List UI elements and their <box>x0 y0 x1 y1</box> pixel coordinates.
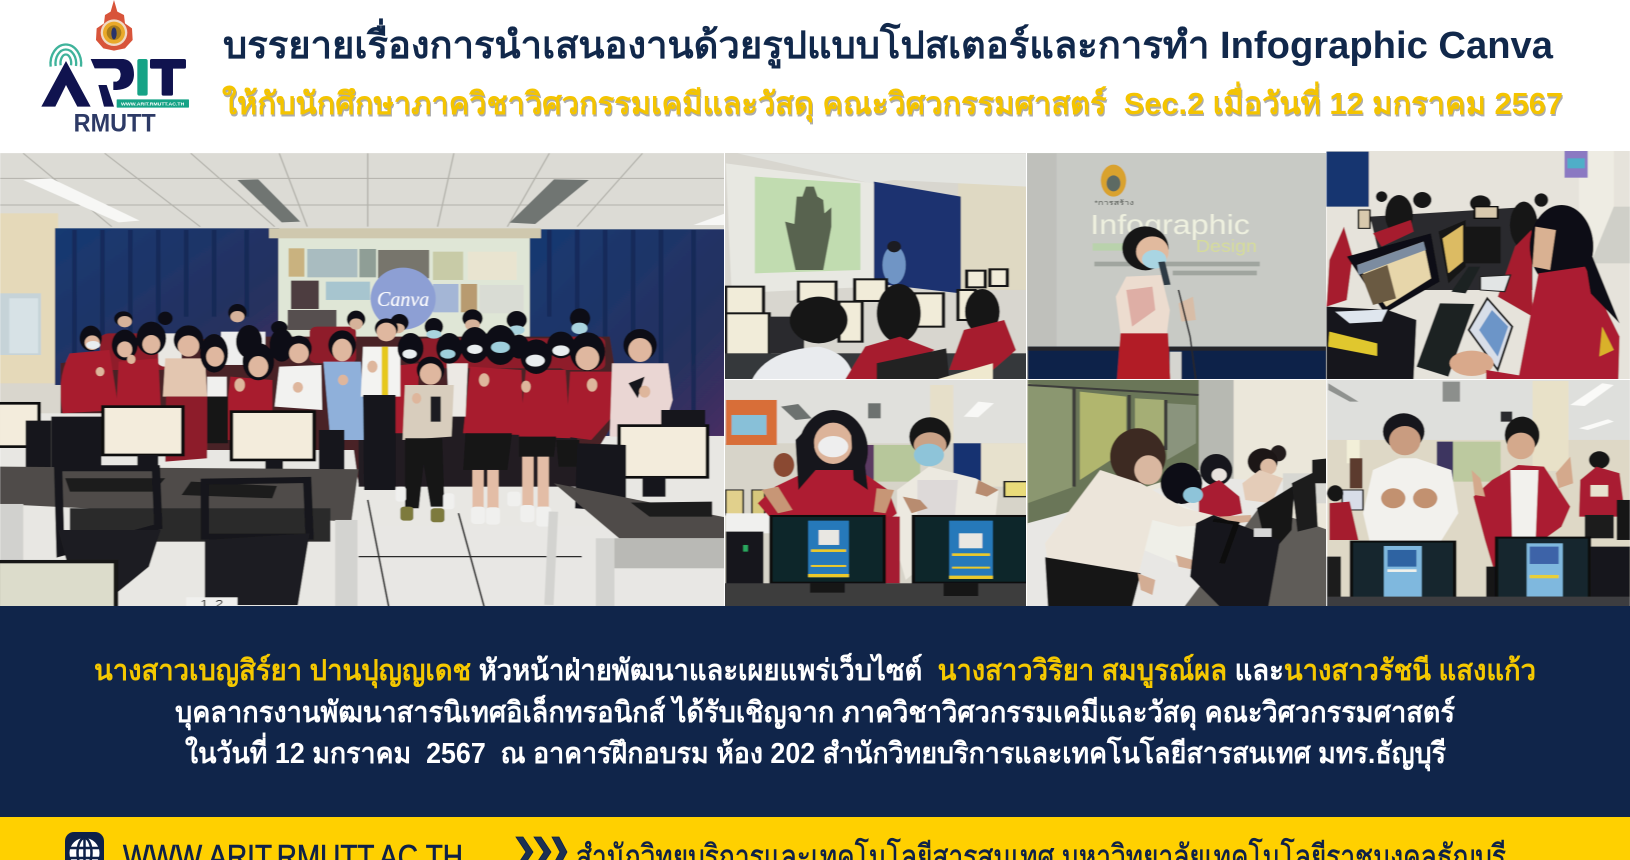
photo: group portrait with Canva screen: 12 <box>200 597 223 610</box>
chairs <box>58 468 310 553</box>
photo: presenter at Infographic Design slide: *การสร้าง <box>1094 199 1134 207</box>
photo: presenter at Infographic Design slide: Infographic <box>1090 209 1250 240</box>
logo letters ARIT <box>41 59 186 107</box>
photo: presenter at Infographic Design slide: Design <box>1196 237 1257 256</box>
backing crowd <box>61 337 621 483</box>
keyboards <box>65 478 712 517</box>
seated students <box>1270 445 1286 461</box>
curtains <box>55 228 279 385</box>
website tag: WWW.ARIT.RMUTT.AC.TH <box>121 101 185 106</box>
back row students <box>100 327 605 370</box>
photo: presenter at Infographic Design slide <box>1026 150 1328 383</box>
photo: two students with poster on monitors <box>720 380 1028 607</box>
presenter <box>1122 226 1169 270</box>
icon: signal waves <box>50 44 81 67</box>
photo: group portrait with Canva screen <box>0 150 730 612</box>
description line 1: นางสาวเบญสิร์ยา ปานปุญญเดช หัวหน้าฝ่ายพัฒนาและเผยแพร่เว็บไซต์ นางสาววิริยา สมบูรณ์ผล และนางสาวรัชนี แสงแก้ว <box>94 652 1536 688</box>
description line 2: บุคลากรงานพัฒนาสารนิเทศอิเล็กทรอนิกส์ ได้รับเชิญจาก ภาควิชาวิศวกรรมเคมีและวัสดุ คณะวิศวกรรมศาสตร์ <box>175 694 1455 730</box>
projector screen <box>278 237 530 337</box>
photo: speaker at projector screen with hand <box>720 150 1028 383</box>
desks <box>0 467 358 522</box>
monitors <box>1351 542 1455 603</box>
website tag <box>117 99 189 108</box>
panel: navy description <box>0 606 1630 817</box>
subtitle: ให้กับนักศึกษาภาควิชาวิศวกรรมเคมีและวัสดุ คณะวิศวกรรมศาสตร์ Sec.2 เมื่อวันที่ 12 มกราคม 2567 <box>222 81 1563 123</box>
title: บรรยายเรื่องการนำเสนองานด้วยรูปแบบโปสเตอร์และการทำ Infographic Canva <box>223 18 1554 69</box>
logo: ARIT RMUTT <box>41 0 189 137</box>
photo: students at workstations <box>1327 150 1630 383</box>
photo: group portrait with Canva screen: Canva <box>377 289 429 311</box>
panel: yellow footer <box>0 817 1630 860</box>
photo: two male students with poster <box>1327 380 1630 607</box>
icon: triple chevron <box>516 837 567 860</box>
desk, tower and monitors <box>1184 507 1328 607</box>
logo wordmark RMUTT: RMUTT <box>74 110 156 137</box>
teacher floral and red skirt <box>163 358 207 397</box>
front row: heads <box>80 318 657 383</box>
thumbs up hands <box>96 355 650 404</box>
left student <box>1383 413 1425 450</box>
front row: jackets <box>61 350 621 440</box>
photo: instructor helping students <box>1026 380 1328 607</box>
monitors with poster <box>771 516 884 583</box>
ceiling <box>0 153 730 230</box>
instructor <box>1110 428 1166 485</box>
monitors <box>0 403 708 477</box>
right student <box>1504 416 1540 448</box>
description line 3: ในวันที่ 12 มกราคม 2567 ณ อาคารฝึกอบรม ห้อง 202 สำนักวิทยบริการและเทคโนโลยีสารสนเทศ มทร.ธัญบุรี <box>185 732 1446 771</box>
icon: globe <box>65 832 104 860</box>
wall <box>0 213 58 387</box>
floor <box>358 527 730 607</box>
icon: university crest <box>96 0 133 51</box>
